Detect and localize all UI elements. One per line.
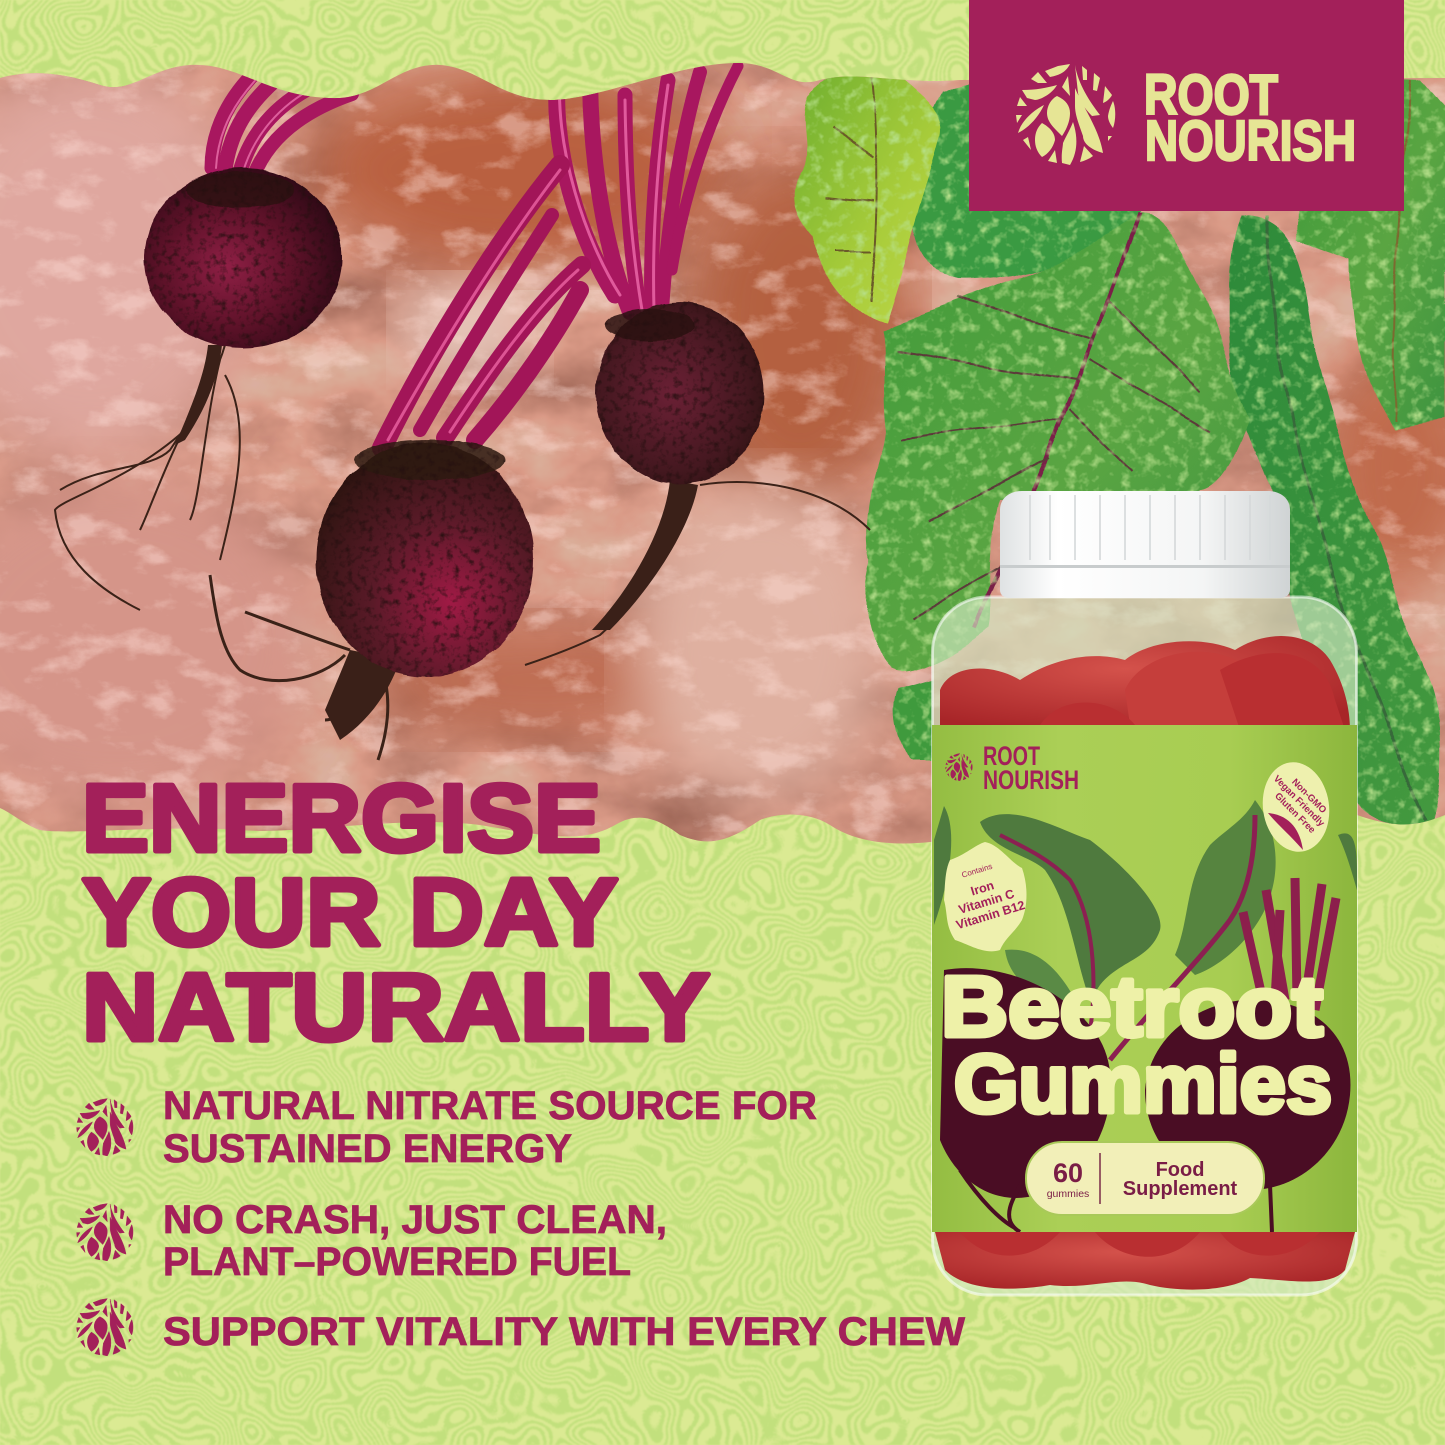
jar body	[932, 597, 1357, 1295]
logo wordmark: NOURISH	[1145, 109, 1356, 173]
icon: root mark	[77, 1299, 133, 1356]
badge: dietary claims: Non-GMO	[1289, 777, 1328, 816]
pill: count and food supplement	[1026, 1142, 1264, 1215]
logo mark	[1016, 64, 1115, 165]
label logo: ROOT	[983, 741, 1040, 771]
benefit 1: SUSTAINED ENERGY	[163, 1127, 572, 1171]
leaf: top middle	[912, 75, 1145, 282]
headline: NATURALLY	[82, 954, 710, 1061]
headline: ENERGISE	[82, 765, 601, 872]
benefit 2: NO CRASH, JUST CLEAN,	[163, 1198, 667, 1242]
badge: dietary claims: Gluten Free	[1272, 791, 1317, 836]
label logo	[945, 741, 1079, 795]
badge: contains vitamins: Vitamin B12	[954, 898, 1027, 932]
pill: count and food supplement: gummies	[1047, 1188, 1089, 1200]
leaf: large centre	[864, 215, 1250, 760]
label leaves	[934, 800, 1357, 1060]
badge: dietary claims	[1257, 758, 1335, 856]
logo wordmark	[1144, 63, 1356, 173]
beetroot 2	[210, 165, 582, 760]
icon: root mark	[77, 1099, 133, 1156]
benefit 2	[77, 1198, 667, 1284]
leaves	[793, 67, 1445, 826]
badge: contains vitamins: Vitamin C	[957, 887, 1016, 917]
stone surface	[0, 50, 1445, 850]
pill: count and food supplement: Food	[1156, 1159, 1204, 1181]
bottle cap	[1000, 491, 1290, 598]
label	[932, 725, 1357, 1232]
product name	[944, 974, 1332, 1116]
leaf: top right	[1295, 75, 1445, 428]
product name: Beetroot	[941, 960, 1323, 1055]
label logo: NOURISH	[983, 765, 1079, 795]
brand logo panel	[969, 0, 1404, 211]
badge: contains vitamins	[942, 842, 1027, 951]
pill: count and food supplement: 60	[1053, 1158, 1083, 1188]
logo wordmark: ROOT	[1144, 63, 1278, 127]
beetroot 1	[55, 66, 352, 610]
benefit list	[77, 1084, 965, 1356]
roots	[55, 345, 240, 610]
photo: beetroots on a stone surface	[0, 50, 1445, 850]
benefit 3: SUPPORT VITALITY WITH EVERY CHEW	[163, 1310, 965, 1354]
badge: contains vitamins: Iron	[969, 878, 996, 899]
benefit 3	[77, 1299, 965, 1356]
badge: contains vitamins: Contains	[961, 862, 993, 880]
pill: count and food supplement: Supplement	[1123, 1178, 1238, 1200]
headline: YOUR DAY	[82, 859, 618, 966]
label beetroots	[940, 968, 1350, 1232]
badge: dietary claims: Vegan Friendly	[1271, 773, 1327, 830]
benefit 1: NATURAL NITRATE SOURCE FOR	[163, 1084, 817, 1128]
beetroot stalks	[1243, 878, 1336, 1010]
benefit 1	[77, 1084, 817, 1171]
beetroot 3 (right, behind)	[525, 66, 870, 665]
body	[144, 168, 342, 348]
product bottle	[932, 491, 1357, 1295]
product name: Gummies	[954, 1037, 1332, 1130]
leaf: lime top leaf	[793, 67, 941, 322]
benefit 2: PLANT–POWERED FUEL	[163, 1240, 631, 1284]
headline	[82, 765, 710, 1061]
leaf: long right	[1228, 215, 1441, 826]
icon: root mark	[77, 1204, 133, 1261]
stems	[212, 66, 352, 175]
gummies visible above and below the label	[935, 636, 1355, 1290]
